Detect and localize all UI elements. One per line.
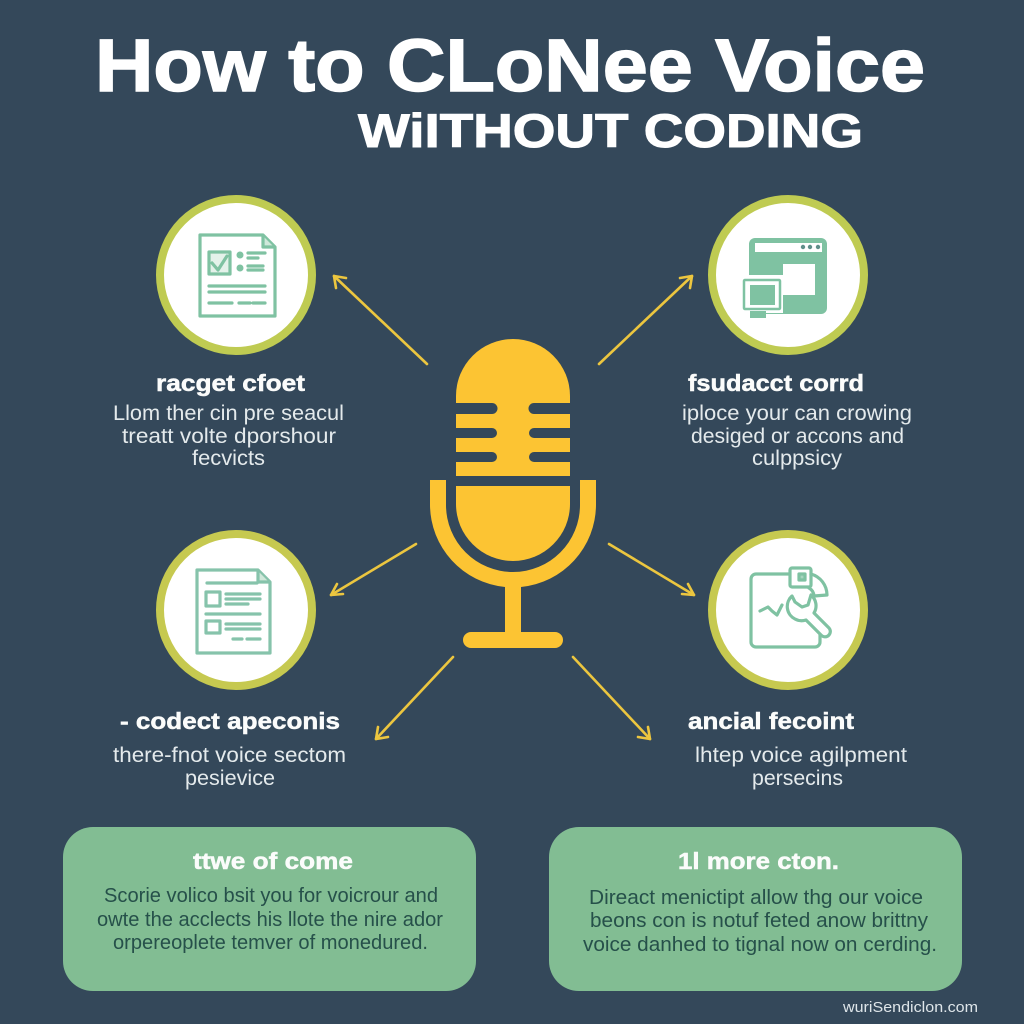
panel: lower left step	[113, 534, 346, 790]
step description: lhtep voice agilpment	[695, 744, 907, 767]
arrow: up left	[334, 276, 427, 364]
icon: form document	[160, 534, 312, 686]
step description: pesievice	[185, 767, 275, 790]
callout text: orpereoplete temver of monedured.	[113, 931, 428, 954]
panel: top right step	[682, 199, 912, 470]
icon: checklist document	[160, 199, 312, 351]
callout text: beons con is notuf feted anow brittny	[590, 909, 929, 932]
step description: iploce your can crowing	[682, 402, 912, 425]
callout text: voice danhed to tignal now on cerding.	[583, 933, 937, 956]
callout text	[97, 884, 443, 954]
arrow: up right	[599, 276, 692, 364]
callout heading: 1l more cton.	[678, 848, 839, 874]
step heading: racget cfoet	[156, 370, 305, 396]
callout text	[583, 886, 937, 956]
title: WiITHOUT CODING	[358, 104, 863, 157]
step heading: ancial fecoint	[688, 708, 854, 734]
footer url: wuriSendiclon.com	[842, 999, 978, 1016]
panel: left callout	[63, 827, 476, 991]
arrow: middle right	[609, 544, 694, 595]
step description	[113, 402, 344, 470]
panel: lower right step	[688, 534, 907, 790]
step description: Llom ther cin pre seacul	[113, 402, 344, 425]
icon: chart and wrench	[712, 534, 864, 686]
title	[95, 24, 925, 157]
panel: right callout	[549, 827, 962, 991]
step description: there-fnot voice sectom	[113, 744, 346, 767]
arrow: middle left	[331, 544, 416, 595]
step description	[682, 402, 912, 470]
step description	[695, 744, 907, 790]
step description	[113, 744, 346, 790]
title: How to CLoNee Voice	[95, 24, 925, 107]
step description: persecins	[752, 767, 843, 790]
step heading: - codect apeconis	[120, 708, 340, 734]
step description: treatt volte dporshour	[122, 425, 336, 448]
panel: top left step	[113, 199, 344, 470]
step heading: fsudacct corrd	[688, 370, 864, 396]
arrow: lower right	[573, 657, 650, 739]
callout heading: ttwe of come	[193, 848, 353, 874]
arrow: lower left	[376, 657, 453, 739]
central microphone icon	[430, 339, 596, 648]
callout text: Scorie volico bsit you for voicrour and	[104, 884, 438, 907]
step description: fecvicts	[192, 447, 265, 470]
step description: desiged or accons and	[691, 425, 904, 448]
callout text: Direact menictipt allow thg our voice	[589, 886, 923, 909]
icon: application windows	[712, 199, 864, 351]
callout text: owte the acclects his llote the nire ador	[97, 908, 443, 931]
step description: culppsicy	[752, 447, 843, 470]
